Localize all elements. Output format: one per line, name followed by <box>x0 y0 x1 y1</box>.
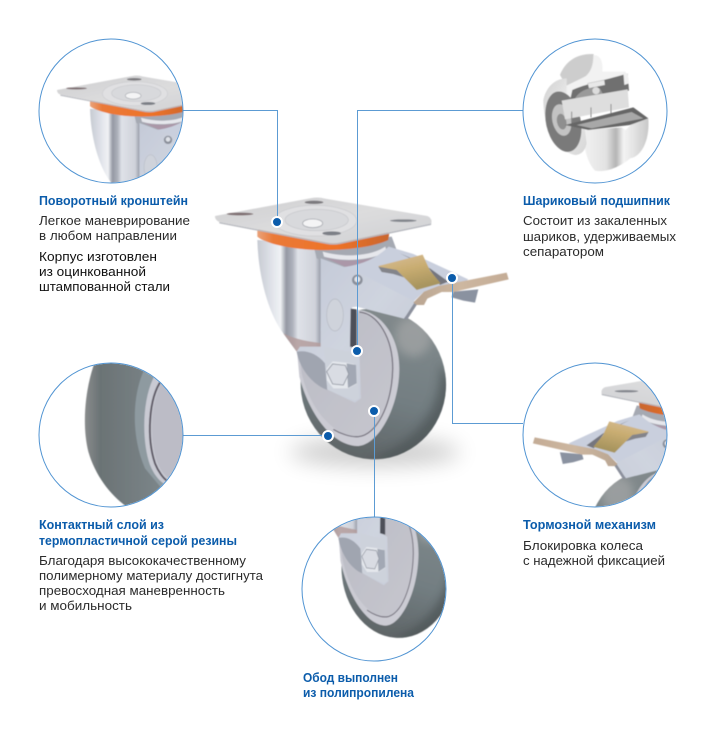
description: Благодаря высококачественному <box>39 554 247 568</box>
body note: Корпус изготовлен <box>39 250 157 264</box>
text block: brake <box>523 518 665 568</box>
text block: ball bearing <box>523 194 677 259</box>
marker dots <box>272 217 457 441</box>
shaft <box>562 89 629 119</box>
heading: Контактный слой из <box>39 518 164 532</box>
heading <box>39 518 237 548</box>
connector lines <box>183 110 523 517</box>
lower cavity <box>565 107 648 130</box>
description: с надежной фиксацией <box>523 554 665 568</box>
description: в любом направлении <box>39 229 177 243</box>
description <box>523 539 665 568</box>
description: Блокировка колеса <box>523 539 643 553</box>
description: полимерному материалу достигнута <box>39 569 263 583</box>
body note <box>39 250 170 294</box>
description: превосходная маневренность <box>39 584 225 598</box>
heading: термопластичной серой резины <box>39 534 237 548</box>
foot lower <box>583 118 649 171</box>
section white <box>566 55 625 96</box>
heading: Шариковый подшипник <box>523 194 671 208</box>
far half of tyre <box>560 54 594 86</box>
description: сепаратором <box>523 245 604 259</box>
main caster wheel illustration <box>215 197 509 469</box>
text block: rim: Обод выполнен <box>303 671 398 685</box>
description: Легкое маневрирование <box>39 214 190 228</box>
face outer <box>543 78 587 155</box>
body note: штампованной стали <box>39 280 170 294</box>
description <box>523 214 677 259</box>
circle: ball bearing detail <box>523 39 667 183</box>
text block: rim <box>303 671 415 700</box>
description <box>39 554 263 613</box>
text block: swivel bracket <box>39 194 190 294</box>
description: шариков, удерживаемых <box>523 230 677 244</box>
circle: rim detail <box>302 516 446 662</box>
text block: rim: из полипропилена <box>303 686 415 700</box>
circle: swivel bracket detail <box>38 38 184 184</box>
heading: Тормозной механизм <box>523 518 656 532</box>
description: и мобильность <box>39 599 132 613</box>
caster <box>215 197 509 469</box>
circle: tyre contact layer detail <box>39 362 187 507</box>
ground shadow <box>290 438 460 466</box>
circle: brake mechanism detail <box>522 362 668 508</box>
heading: Поворотный кронштейн <box>39 194 188 208</box>
description <box>39 214 190 243</box>
description: Состоит из закаленных <box>523 214 668 228</box>
text block: contact layer <box>39 518 263 613</box>
body note: из оцинкованной <box>39 265 146 279</box>
